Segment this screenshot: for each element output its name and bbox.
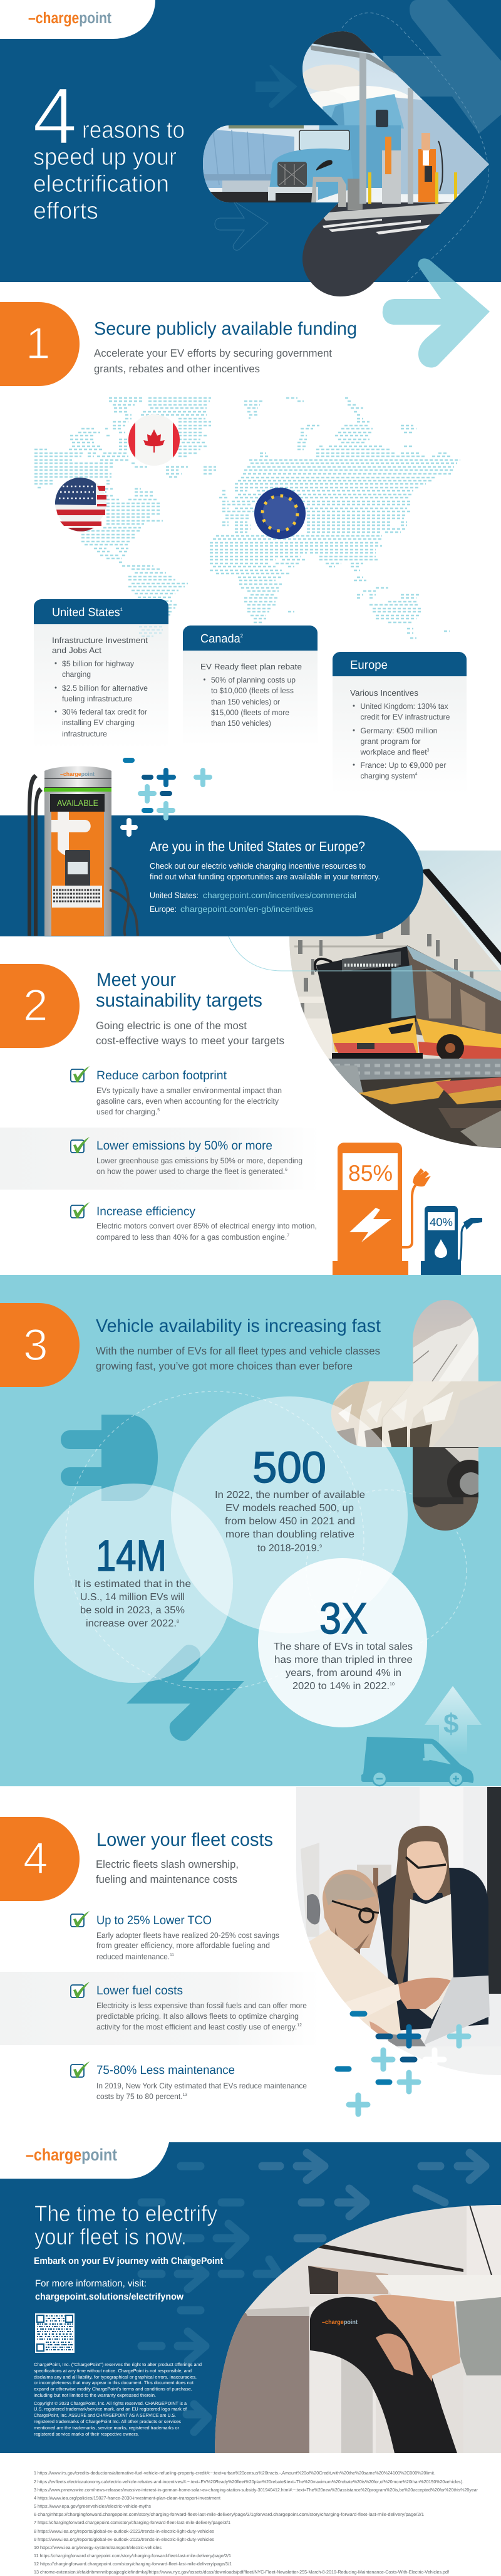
footer background arrows: [142, 2153, 485, 2432]
title: [33, 71, 185, 224]
benefit: lower TCO: Early adopter fleets have realized 20-25% cost savings: [96, 1931, 279, 1940]
footer band: [0, 2142, 501, 2453]
benefit: lower emissions: Lower greenhouse gas emissions by 50% or more, depending: [96, 1156, 302, 1165]
stat circle: 500: EV models reached 500, up: [225, 1503, 354, 1514]
benefit: lower TCO: Up to 25% Lower TCO: [96, 1914, 212, 1927]
benefit: lower fuel costs: [71, 1982, 307, 2031]
benefit: lower emissions: [71, 1137, 302, 1176]
stat circle: 500: 9: [319, 1544, 322, 1549]
stat circle: 500: In 2022, the number of available: [215, 1490, 365, 1500]
card body: $15,000 (fleets of more: [211, 708, 289, 717]
number tab 2: [0, 964, 80, 1048]
benefit: increase efficiency: 7: [287, 1233, 289, 1238]
benefit: lower emissions: 6: [285, 1168, 287, 1172]
benefit: lower TCO: 11: [170, 1953, 174, 1957]
legal text: expand or otherwise modify ChargePoint’s terms and conditions of purchase,: [34, 2386, 192, 2392]
stat circle: 3X: The share of EVs in total sales: [274, 1641, 413, 1652]
title: electrification: [33, 171, 169, 197]
closing text: The time to electrify: [34, 2201, 217, 2226]
logo tab: [0, 0, 155, 39]
card body: $2.5 billion for alternative: [62, 684, 148, 693]
legal text: disclaims any and all liability, for typographical or graphical errors, inaccuracies,: [34, 2374, 197, 2380]
legal text: Copyright © 2023 ChargePoint, Inc. All rights reserved. CHARGEPOINT is a: [34, 2401, 187, 2406]
benefit: less maintenance: [71, 2061, 307, 2101]
closing text: Embark on your EV journey with ChargePoint: [34, 2256, 223, 2266]
callout text: Europe:: [150, 904, 177, 914]
gray band: [0, 1128, 319, 1190]
stat circle: 14M: 8: [177, 1620, 179, 1624]
benefit: lower fuel costs: activity for the most efficient and least costly use of energy.: [96, 2023, 300, 2031]
title: efforts: [33, 198, 98, 224]
references: 8 https://www.iea.org/reports/global-ev-outlook-2023/trends-in-electric-light-duty-vehicles: [34, 2528, 214, 2534]
number 1: 1: [26, 319, 50, 369]
card: Canada: [183, 626, 318, 746]
benefit: increase efficiency: Increase efficiency: [96, 1205, 195, 1218]
flag: Canada: [128, 414, 180, 466]
card body: charging: [62, 670, 91, 679]
small logo: –chargepoint: [60, 771, 95, 777]
heading: vehicle availability: growing fast, you’ve got more choices than ever before: [96, 1360, 353, 1372]
benefit: lower fuel costs: Electricity is less expensive than fossil fuels and can offer more: [96, 2001, 307, 2010]
callout text: find out what funding opportunities are available in your territory.: [150, 872, 380, 881]
logo: –chargepoint: [26, 2145, 117, 2164]
benefit: lower TCO: from greater efficiency, more affordable fueling and: [96, 1941, 270, 1950]
legal text: or incompleteness that may appear in this document. This document does not: [34, 2380, 194, 2385]
heading: vehicle availability: With the number of EVs for all fleet types and vehicle classes: [96, 1345, 380, 1357]
dotted world map: [34, 398, 460, 638]
up arrow with dollar sign: [425, 1686, 482, 1755]
heading: sustainability: Meet your: [96, 970, 176, 990]
gas pump icon: [421, 1206, 482, 1275]
references: 11 https://chargingforward.chargepoint.com/story/charging-forward-fleet-last-mile-delivery/page/2/1: [34, 2553, 231, 2558]
references: 4 https://www.iea.org/policies/15027-france-2030-investment-plan-clean-transport-investment: [34, 2495, 220, 2501]
number 4: 4: [23, 1834, 48, 1883]
card body: 4: [415, 772, 418, 777]
title: reasons to: [82, 117, 185, 144]
closing text: For more information, visit:: [35, 2278, 147, 2289]
heading: secure funding: Secure publicly available funding: [94, 319, 357, 339]
references: 1 https://www.irs.gov/credits-deductions/alternative-fuel-vehicle-refueling-property-credit#:~:text=urban%20census%20tracts.-,Amount%20of%20Credit,with%20the%20same%20%24100%2C000%20limit.: [34, 2470, 435, 2476]
benefit: lower TCO: [71, 1911, 279, 1961]
card body: [350, 688, 450, 780]
stat circle: 3X: years, from around 4% in: [286, 1668, 401, 1678]
bus photo: [289, 851, 501, 1148]
benefit: lower TCO: reduced maintenance.: [96, 1952, 174, 1961]
card title: Europe: [350, 659, 388, 672]
hero photo: electric truck at charging station: [200, 25, 501, 303]
legal text: mentioned are the trademarks, service marks, registered trademarks or: [34, 2425, 180, 2431]
benefit: reduce carbon footprint: Reduce carbon footprint: [96, 1069, 227, 1082]
title: 4: [33, 71, 77, 161]
callout text: United States:: [150, 891, 199, 900]
benefit: less maintenance: In 2019, New York City estimated that EVs reduce maintenance: [96, 2081, 307, 2090]
up arrow with dollar sign: $: [443, 1709, 458, 1739]
footer photo: hand with charging connector: [215, 2205, 501, 2457]
benefit: reduce carbon footprint: 5: [157, 1108, 160, 1113]
card body: than 150 vehicles) or: [211, 698, 280, 706]
stat circle: 3X: [258, 1558, 427, 1727]
card body: [52, 636, 148, 738]
references: 13 chrome-extension://efaidnbmnnnibpcajpcglclefindmkaj/https://www.nyc.gov/assets/dcas/downloads/pdf/fleet/NYC-Fleet-Newsletter-255-March-8-2019-Reducing-Maintenance-Costs-With-Electric-Vehicles.pdf: [34, 2569, 449, 2575]
benefit: less maintenance: 13: [183, 2093, 187, 2097]
references: 3 https://www.prnewswire.com/news-releases/massive-interest-in-german-home-solar-ev-charging-station-subsidy-301940412.html#:~:text=The%20new%20assistance%20program%20is,be%20accepted%20for%20this%20year: [34, 2487, 478, 2493]
number tab 4: [0, 1817, 80, 1901]
card body: fueling infrastructure: [62, 694, 132, 703]
benefit: increase efficiency: Electric motors convert over 85% of electrical energy into motion,: [96, 1222, 317, 1230]
benefit: reduce carbon footprint: EVs typically have a smaller environmental impact than: [96, 1086, 282, 1095]
stat circle: 500: to 2018-2019.: [257, 1543, 319, 1554]
card body: charging system: [361, 772, 418, 780]
card body: than 150 vehicles): [211, 719, 271, 728]
legal text: ChargePoint, Inc. ASSURE and CHARGEPOINT AS A SERVICE are U.S.: [34, 2412, 176, 2418]
benefit: lower fuel costs: 12: [297, 2023, 302, 2028]
callout band: [0, 815, 423, 936]
decorative curve line: [229, 936, 501, 971]
stat circle: 14M: U.S., 14 million EVs will: [80, 1592, 185, 1603]
title: speed up your: [33, 144, 177, 170]
plus and minus decoration: [338, 2014, 468, 2114]
card title: 2: [240, 633, 244, 639]
gray band: [0, 1972, 319, 2045]
card body: infrastructure: [62, 730, 107, 738]
heading: secure funding: [94, 319, 357, 375]
legal text: ChargePoint, Inc. (“ChargePoint”) reserves the right to alter product offerings and: [34, 2362, 202, 2367]
closing text: chargepoint.solutions/electrifynow: [35, 2291, 183, 2302]
references: 6 charginhttps://chargingforward.chargepoint.com/story/charging-forward-fleet-last-mile-delivery/page/3/1gforward.chargepoint.com/story/charging-forward-fleet-last-mile-delivery/page/2/1: [34, 2511, 424, 2517]
flag: European Union: [254, 488, 306, 539]
stat circle: 500: 500: [252, 1443, 326, 1492]
card body: EV Ready fleet plan rebate: [200, 662, 302, 671]
legal text: registered service marks of their respective owners.: [34, 2431, 139, 2437]
number 2: 2: [23, 981, 48, 1030]
heading: sustainability: [96, 970, 284, 1047]
callout text: chargepoint.com/incentives/commercial: [203, 891, 356, 900]
benefit: reduce carbon footprint: gasoline cars, even when accounting for the electricity: [96, 1097, 279, 1106]
charger illustration: [28, 766, 138, 936]
stat circle: 14M: increase over 2022.: [86, 1618, 174, 1629]
section 3 background: [0, 1275, 501, 1786]
benefit: less maintenance: costs by 75 to 80 percent.: [96, 2092, 186, 2101]
heading: fleet costs: Lower your fleet costs: [96, 1830, 273, 1850]
card body: [200, 662, 302, 728]
callout text: Check out our electric vehicle charging incentive resources to: [150, 861, 366, 871]
legal text: registered trademarks of ChargePoint Inc. All other products or services: [34, 2419, 181, 2424]
card body: to $10,000 (fleets of less: [211, 686, 294, 695]
plug icon: [61, 1415, 158, 1501]
benefit: reduce carbon footprint: [71, 1066, 282, 1116]
stat circle: 14M: be sold in 2023, a 35%: [80, 1605, 185, 1616]
heading: fleet costs: fueling and maintenance costs: [96, 1873, 237, 1885]
dashed circles: [66, 1391, 467, 1690]
benefit: reduce carbon footprint: used for charging.: [96, 1107, 159, 1116]
references: 12 https://chargingforward.chargepoint.com/story/charging-forward-fleet-last-mile-delivery/page/3/1: [34, 2561, 232, 2567]
card: United States: [34, 599, 168, 749]
card: Europe: [333, 652, 467, 795]
heading: sustainability: cost-effective ways to meet your targets: [96, 1035, 284, 1047]
heading: sustainability: Going electric is one of the most: [96, 1020, 247, 1032]
flag: United States: [55, 478, 106, 531]
heading: secure funding: Accelerate your EV efforts by securing government: [94, 347, 332, 359]
legal text: specifications at any time without notice. ChargePoint is not responsible, and: [34, 2368, 192, 2374]
card title: Canada: [200, 632, 242, 646]
callout text: Are you in the United States or Europe?: [150, 839, 365, 854]
closing text: [34, 2201, 223, 2302]
card body: Various Incentives: [350, 688, 419, 698]
heading: sustainability: sustainability targets: [96, 990, 262, 1011]
heading: vehicle availability: [96, 1316, 381, 1372]
references: 5 https://www.epa.gov/greenvehicles/electric-vehicle-myths: [34, 2503, 151, 2509]
light arrow lower right: [383, 258, 490, 368]
references: [34, 2470, 478, 2575]
heading: fleet costs: [96, 1830, 273, 1885]
references: 10 https://www.iea.org/energy-system/transport/electric-vehicles: [34, 2545, 162, 2550]
heading: vehicle availability: Vehicle availability is increasing fast: [96, 1316, 381, 1336]
stat circle: 14M: [34, 1484, 233, 1683]
card body: credit for EV infrastructure: [361, 713, 450, 721]
benefit: lower fuel costs: predictable pricing. It also allows fleets to optimize charging: [96, 2012, 299, 2021]
references: 7 https://chargingforward.chargepoint.com/story/charging-forward-fleet-last-mile-delivery/page/3/1: [34, 2520, 230, 2525]
logo: –chargepoint: [28, 9, 112, 27]
van photo in plus shape: [331, 1300, 501, 1532]
background arrows: header: [215, 0, 501, 282]
connector logo: –chargepoint: [322, 2319, 358, 2326]
references: 9 https://www.iea.org/reports/global-ev-outlook-2023/trends-in-electric-light-duty-vehicles: [34, 2537, 214, 2542]
card body: Infrastructure Investment: [52, 636, 148, 645]
card body: 3: [427, 748, 430, 753]
benefit: increase efficiency: compared to less than 40% for a gas combustion engine.: [96, 1233, 294, 1242]
card body: 50% of planning costs up: [211, 676, 296, 684]
QR code: [35, 2313, 75, 2353]
footer logo tab: [0, 2142, 169, 2179]
stat circle: 14M: It is estimated that in the: [75, 1579, 191, 1589]
references: 2 https://evfleets.electricautonomy.ca/electric-vehicle-rebates-and-incentives/#:~:text=EV%20Ready%20fleet%20plan%20rebate&text=The%20maximum%20rebate%20is%20for,of%20more%20than%20150%20vehicles).: [34, 2479, 463, 2484]
plus and minus decoration: [123, 760, 210, 834]
card body: Germany: €500 million: [361, 726, 438, 735]
lightning bolt icon: [127, 1645, 244, 1741]
card body: and Jobs Act: [52, 646, 101, 655]
85%: 85%: [348, 1160, 393, 1186]
card body: grant program for: [361, 737, 421, 746]
stat circle: 14M: 14M: [96, 1531, 167, 1580]
number 3: 3: [23, 1321, 48, 1370]
card body: workplace and fleet: [361, 748, 428, 757]
benefit: lower emissions: Lower emissions by 50% or more: [96, 1139, 272, 1153]
card body: United Kingdom: 130% tax: [361, 702, 448, 711]
card body: installing EV charging: [62, 718, 135, 727]
benefit: lower emissions: on how the power used to charge the fleet is generated.: [96, 1167, 290, 1176]
benefit: lower fuel costs: Lower fuel costs: [96, 1984, 183, 1997]
stat circle: 3X: 10: [390, 1682, 395, 1687]
card body: 30% federal tax credit for: [62, 708, 147, 716]
number tab 3: [0, 1303, 80, 1387]
legal text: including but not limited to the warranty expressed therein.: [34, 2392, 156, 2398]
callout text: chargepoint.com/en-gb/incentives: [180, 904, 313, 914]
benefit: less maintenance: 75-80% Less maintenance: [96, 2063, 235, 2077]
legal text: [34, 2362, 202, 2437]
stat circle: 500: [171, 1396, 408, 1633]
header band: [0, 0, 501, 282]
card title: United States: [52, 606, 123, 619]
stat circle: 500: from below 450 in 2021 and: [225, 1516, 355, 1527]
40%: 40%: [430, 1216, 453, 1228]
stat circle: 500: more than doubling relative: [225, 1529, 354, 1540]
card title: 1: [120, 607, 123, 612]
stat circle: 3X: 2020 to 14% in 2022.: [292, 1681, 387, 1692]
office photo: [296, 1787, 501, 2078]
legal text: U.S. registered trademark/service mark, and an EU registered logo mark of: [34, 2406, 187, 2412]
stat circle: 3X: has more than tripled in three: [274, 1655, 413, 1665]
callout text: [150, 839, 380, 914]
card body: France: Up to €9,000 per: [361, 761, 446, 770]
van icon: [361, 1737, 473, 1786]
electric charger icon: [333, 1143, 431, 1275]
available text: AVAILABLE: [57, 798, 98, 808]
closing text: your fleet is now.: [34, 2224, 187, 2249]
benefit: increase efficiency: [71, 1202, 317, 1242]
number tab 1: [0, 302, 80, 386]
stat circle: 3X: 3X: [319, 1594, 368, 1643]
card body: $5 billion for highway: [62, 659, 135, 668]
heading: secure funding: grants, rebates and other incentives: [94, 363, 260, 375]
heading: fleet costs: Electric fleets slash ownership,: [96, 1858, 239, 1870]
